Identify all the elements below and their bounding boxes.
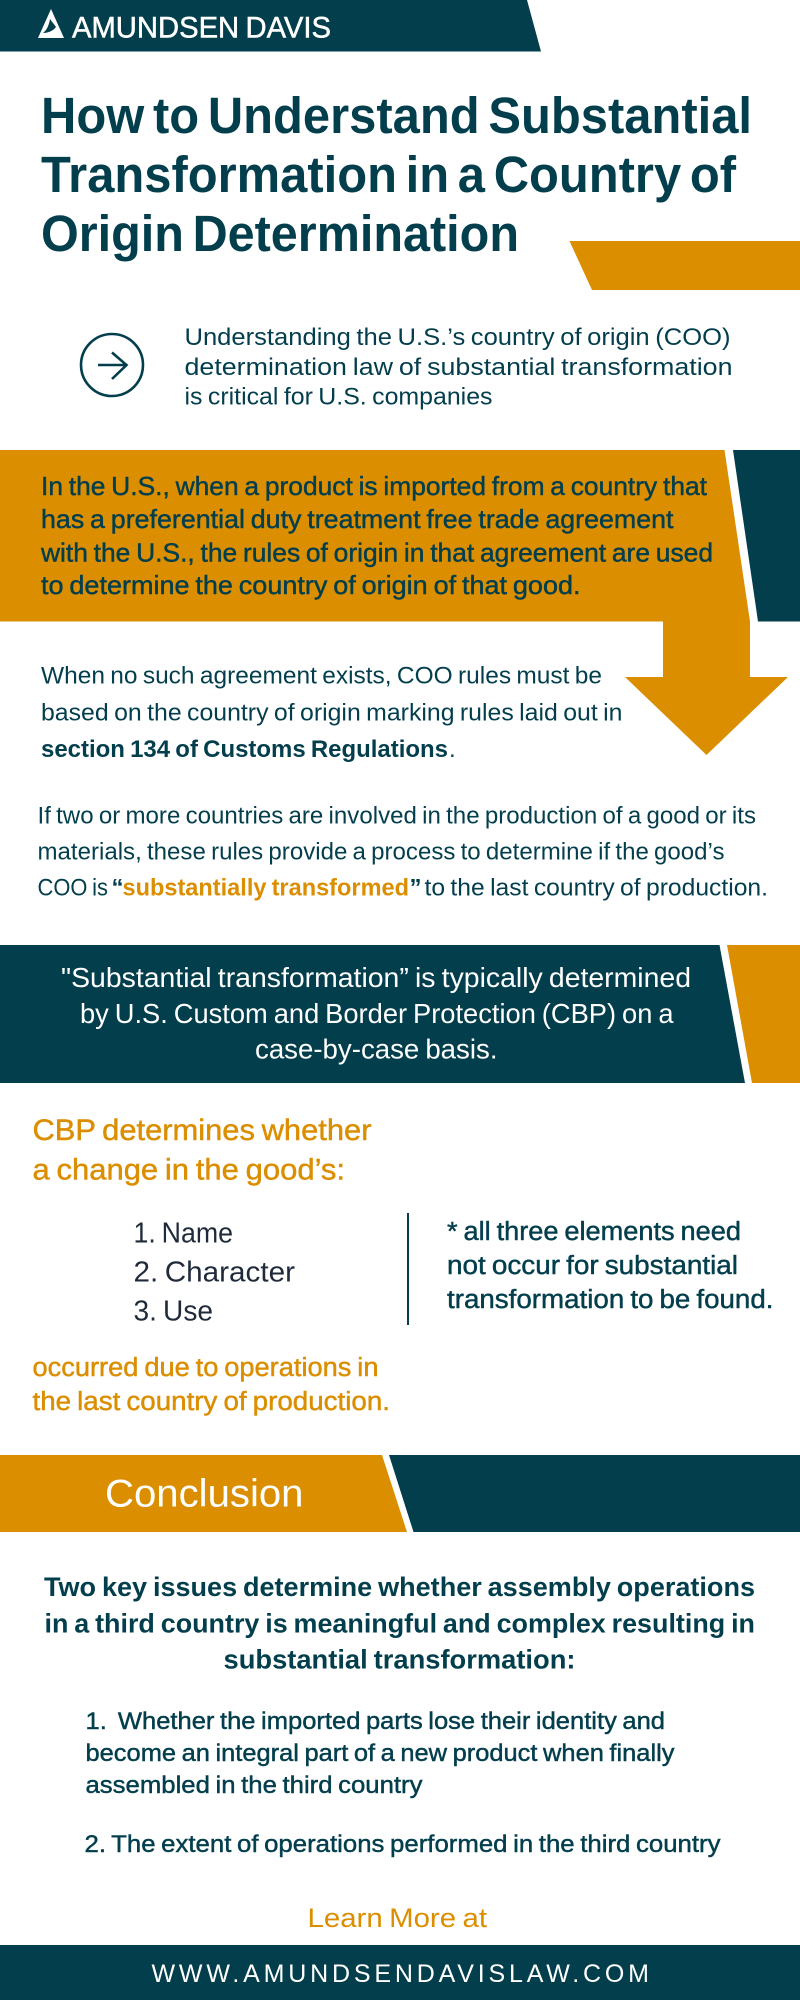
heading: CBP determines <box>32 1114 372 1186</box>
icon: arrow in circle <box>81 334 143 396</box>
intro text <box>184 324 732 410</box>
heading: CBP determines: CBP determines whether <box>32 1114 372 1147</box>
panel: conclusion band <box>0 1455 800 1532</box>
text: occurred due to operations <box>32 1354 390 1416</box>
text block: two key issues: Two key issues determine whether assembly operations <box>44 1572 755 1602</box>
text block: two key issues <box>44 1572 755 1674</box>
intro text: Understanding the U.S.’s country of origin (COO) <box>184 324 730 351</box>
list: key issues: assembled in the third country <box>86 1772 423 1799</box>
text block: no such agreement: based on the country of origin marking rules laid out in <box>41 700 622 726</box>
gold band text: In the U.S., when a product is imported from a country that <box>41 471 708 501</box>
note: all three elements: transformation to be found. <box>447 1286 774 1314</box>
intro text: determination law of substantial transformation <box>184 354 732 381</box>
dark band text: case-by-case basis. <box>255 1034 498 1064</box>
gold band text <box>40 471 713 600</box>
text block: two or more countries: substantially transformed <box>122 874 409 902</box>
list: key issues: become an integral part of a new product when finally <box>86 1740 675 1767</box>
text block: two or more countries: COO is <box>38 874 108 902</box>
text block: no such agreement: section 134 of Customs Regulations <box>41 736 448 763</box>
gold band text: to determine the country of origin of that good. <box>41 570 580 600</box>
call to action: learn more: Learn More at <box>308 1903 488 1933</box>
note: all three elements <box>447 1218 774 1314</box>
panel: gold band with down arrow <box>0 450 800 755</box>
list: key issues: 1. Whether the imported parts lose their identity and <box>86 1708 665 1735</box>
text block: two or more countries: to the last country of production. <box>424 874 768 902</box>
text block: two or more countries: “ <box>112 874 124 902</box>
text block: two or more countries <box>38 802 768 902</box>
panel: dark band <box>0 945 800 1083</box>
header bar with logo <box>0 0 541 52</box>
heading: CBP determines: a change in the good’s: <box>32 1154 345 1186</box>
logo wordmark: AMUNDSEN DAVIS <box>72 12 331 44</box>
footer bar with url <box>0 1945 800 2000</box>
title: Transformation in a Country of <box>41 146 737 203</box>
text block: no such agreement <box>41 662 622 763</box>
text: occurred due to operations: the last country of production. <box>32 1388 390 1416</box>
footer bar with url: WWW.AMUNDSENDAVISLAW.COM <box>152 1960 649 1988</box>
text block: two or more countries: ” <box>410 874 422 902</box>
dark band text <box>61 962 691 1064</box>
text block: no such agreement: When no such agreement exists, COO rules must be <box>41 662 602 690</box>
text block: no such agreement: . <box>449 736 456 763</box>
text: occurred due to operations: occurred due to operations in <box>32 1354 378 1382</box>
accent: dark corner <box>733 450 800 622</box>
text block: two or more countries: materials, these rules provide a process to determine if the good’s <box>38 838 725 866</box>
gold band text: with the U.S., the rules of origin in that agreement are used <box>40 538 713 568</box>
list: name, character, use: 2. Character <box>134 1256 296 1288</box>
list: key issues: 2. The extent of operations performed in the third country <box>84 1831 721 1858</box>
list: key issues <box>84 1708 721 1858</box>
intro text: is critical for U.S. companies <box>184 384 492 410</box>
list: name, character, use: 3. Use <box>134 1296 213 1328</box>
gold accent shape <box>570 241 800 290</box>
text block: two key issues: substantial transformation: <box>224 1644 576 1674</box>
divider <box>407 1213 409 1325</box>
text block: two or more countries: If two or more countries are involved in the production of a good or its <box>38 802 756 830</box>
dark band text: "Substantial transformation” is typically determined <box>61 962 691 993</box>
note: all three elements: * all three elements need <box>447 1218 741 1246</box>
accent: gold corner <box>727 945 800 1083</box>
text block: two key issues: in a third country is meaningful and complex resulting in <box>44 1608 755 1638</box>
list: name, character, use: 1. Name <box>134 1218 233 1250</box>
title <box>41 87 752 262</box>
dark band text: by U.S. Custom and Border Protection (CBP) on a <box>80 998 674 1029</box>
title: How to Understand Substantial <box>41 87 752 144</box>
icon: logo triangle <box>38 9 64 38</box>
heading: conclusion: Conclusion <box>105 1472 304 1516</box>
note: all three elements: not occur for substantial <box>447 1252 738 1280</box>
list: name, character, use <box>134 1218 296 1328</box>
title: Origin Determination <box>41 205 519 262</box>
gold band text: has a preferential duty treatment free trade agreement <box>41 504 674 534</box>
